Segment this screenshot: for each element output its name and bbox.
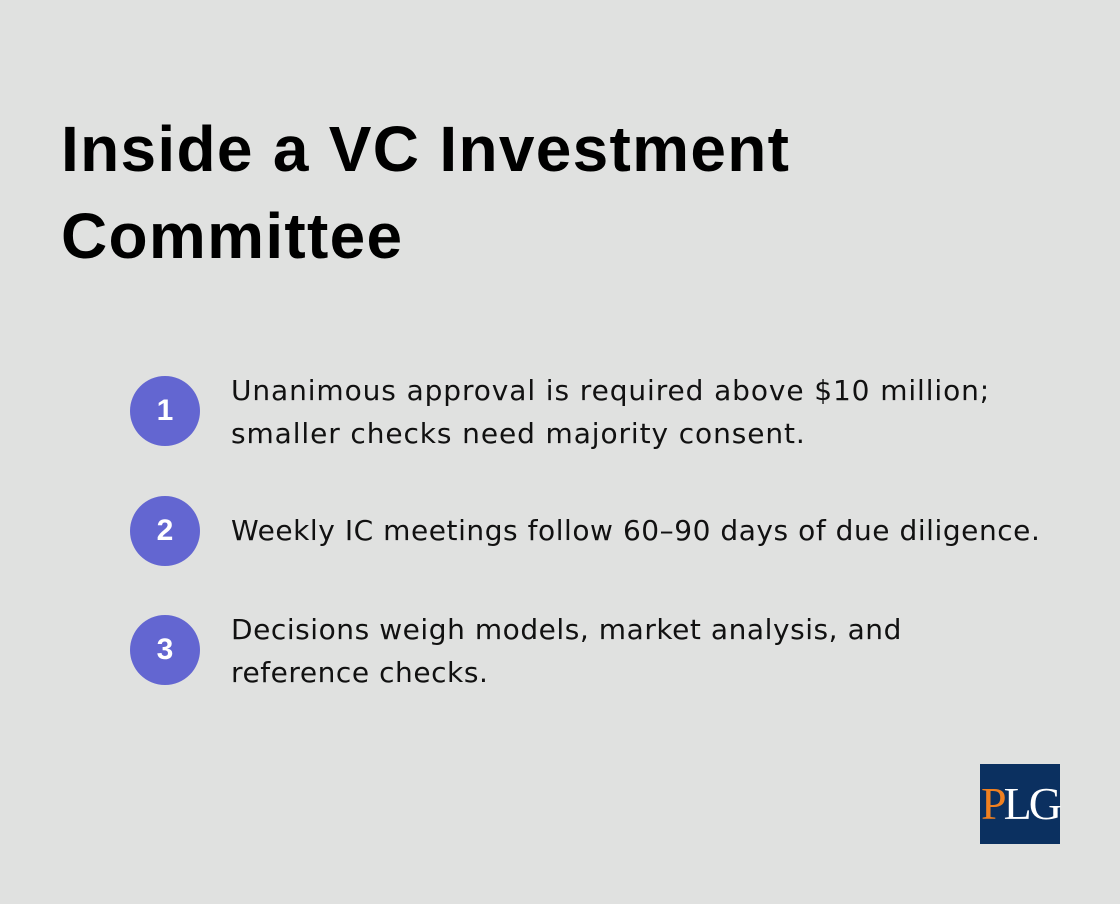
badge 2: [130, 496, 200, 566]
badge 3: [130, 615, 200, 685]
text 1: Unanimous approval is required above $10 million;: [231, 374, 990, 407]
text 1: [231, 374, 990, 450]
text 1: smaller checks need majority consent.: [231, 417, 806, 450]
badge 1: [130, 376, 200, 446]
text 3: Decisions weigh models, market analysis, and: [231, 613, 902, 646]
title: [61, 113, 790, 272]
title: Committee: [61, 200, 403, 272]
text 3: reference checks.: [231, 656, 488, 689]
logo: PLG: [981, 778, 1059, 829]
title: Inside a VC Investment: [61, 113, 790, 185]
badge 1: 1: [157, 394, 173, 427]
text 3: [231, 613, 902, 689]
text 2: Weekly IC meetings follow 60–90 days of due diligence.: [231, 514, 1040, 547]
logo: [980, 764, 1060, 844]
badge 2: 2: [157, 514, 173, 547]
badge 3: 3: [157, 633, 173, 666]
